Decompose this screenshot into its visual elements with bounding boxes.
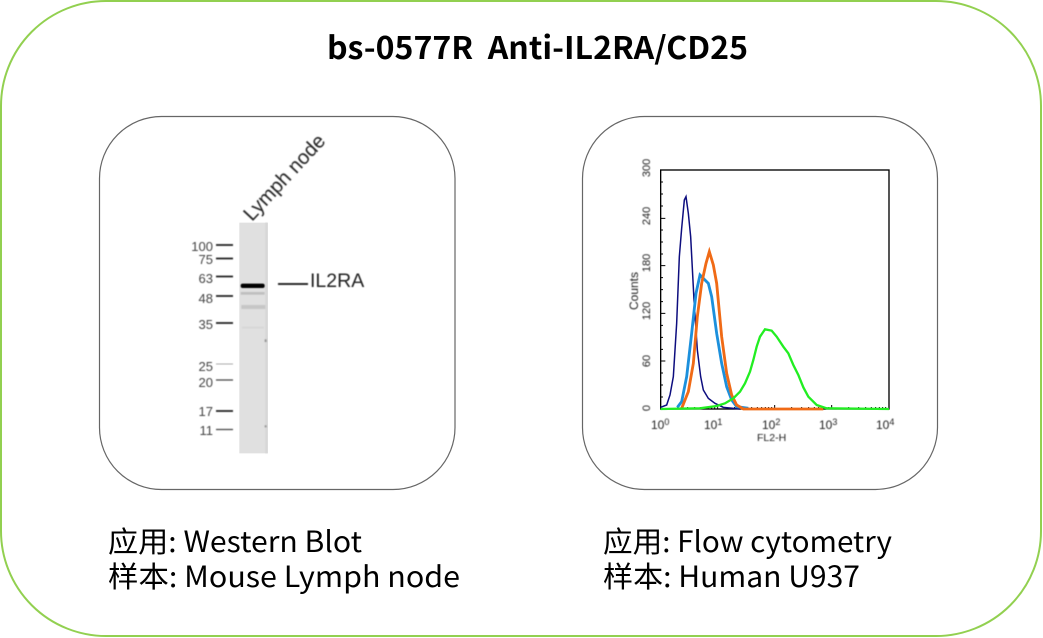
panel: flow cytometry — [582, 116, 938, 490]
x axis labels: 1 — [717, 417, 722, 427]
y axis labels: 0 — [641, 405, 653, 411]
panel: western blot — [100, 116, 455, 490]
y axis labels: 300 — [641, 159, 653, 177]
molecular weight markers: 63 — [199, 271, 213, 286]
x axis labels: 4 — [889, 417, 894, 427]
blot lane — [239, 223, 268, 453]
x axis labels: 2 — [775, 417, 780, 427]
y axis labels: 180 — [641, 254, 653, 272]
x axis labels: 10 — [704, 418, 717, 432]
molecular weight markers: 17 — [199, 404, 213, 419]
x axis labels: 10 — [876, 418, 889, 432]
title: bs-0577R Anti-IL2RA/CD25 — [327, 23, 748, 68]
histogram chart — [661, 170, 889, 409]
molecular weight markers: 20 — [199, 375, 213, 390]
x axis labels: 10 — [651, 418, 664, 432]
x axis labels: 3 — [832, 417, 837, 427]
caption: flow cytometry — [603, 519, 892, 596]
caption: western blot: 应用: Western Blot — [108, 519, 362, 561]
curve: navy — [661, 197, 740, 409]
molecular weight markers: 11 — [200, 423, 213, 438]
y axis labels: Counts — [627, 272, 641, 310]
curve: blue — [677, 275, 748, 408]
caption: western blot: 样本: Mouse Lymph node — [108, 554, 460, 596]
x axis labels: FL2-H — [757, 432, 786, 444]
molecular weight markers: 100 — [191, 239, 213, 254]
y axis labels: 60 — [641, 355, 653, 367]
caption: flow cytometry: 样本: Human U937 — [603, 554, 860, 596]
molecular weight markers: 35 — [199, 317, 213, 332]
x axis labels: 10 — [819, 418, 832, 432]
y axis labels — [627, 159, 653, 411]
molecular weight markers: 75 — [199, 252, 213, 267]
band label IL2RA: IL2RA — [310, 270, 364, 292]
x axis labels: 10 — [762, 418, 775, 432]
lane label: Lymph node — [240, 130, 330, 225]
molecular weight markers — [191, 239, 233, 438]
band label IL2RA — [278, 270, 364, 292]
x axis labels — [651, 417, 894, 444]
caption: western blot — [108, 519, 460, 596]
caption: flow cytometry: 应用: Flow cytometry — [603, 519, 892, 561]
blot bands — [241, 284, 267, 427]
curve: green — [661, 329, 889, 409]
molecular weight markers: 25 — [199, 359, 213, 374]
y axis labels: 240 — [641, 207, 653, 225]
axis ticks — [661, 170, 886, 409]
y axis labels: 120 — [641, 302, 653, 320]
curve: orange — [682, 252, 823, 409]
molecular weight markers: 48 — [199, 291, 213, 306]
x axis labels: 0 — [664, 417, 669, 427]
